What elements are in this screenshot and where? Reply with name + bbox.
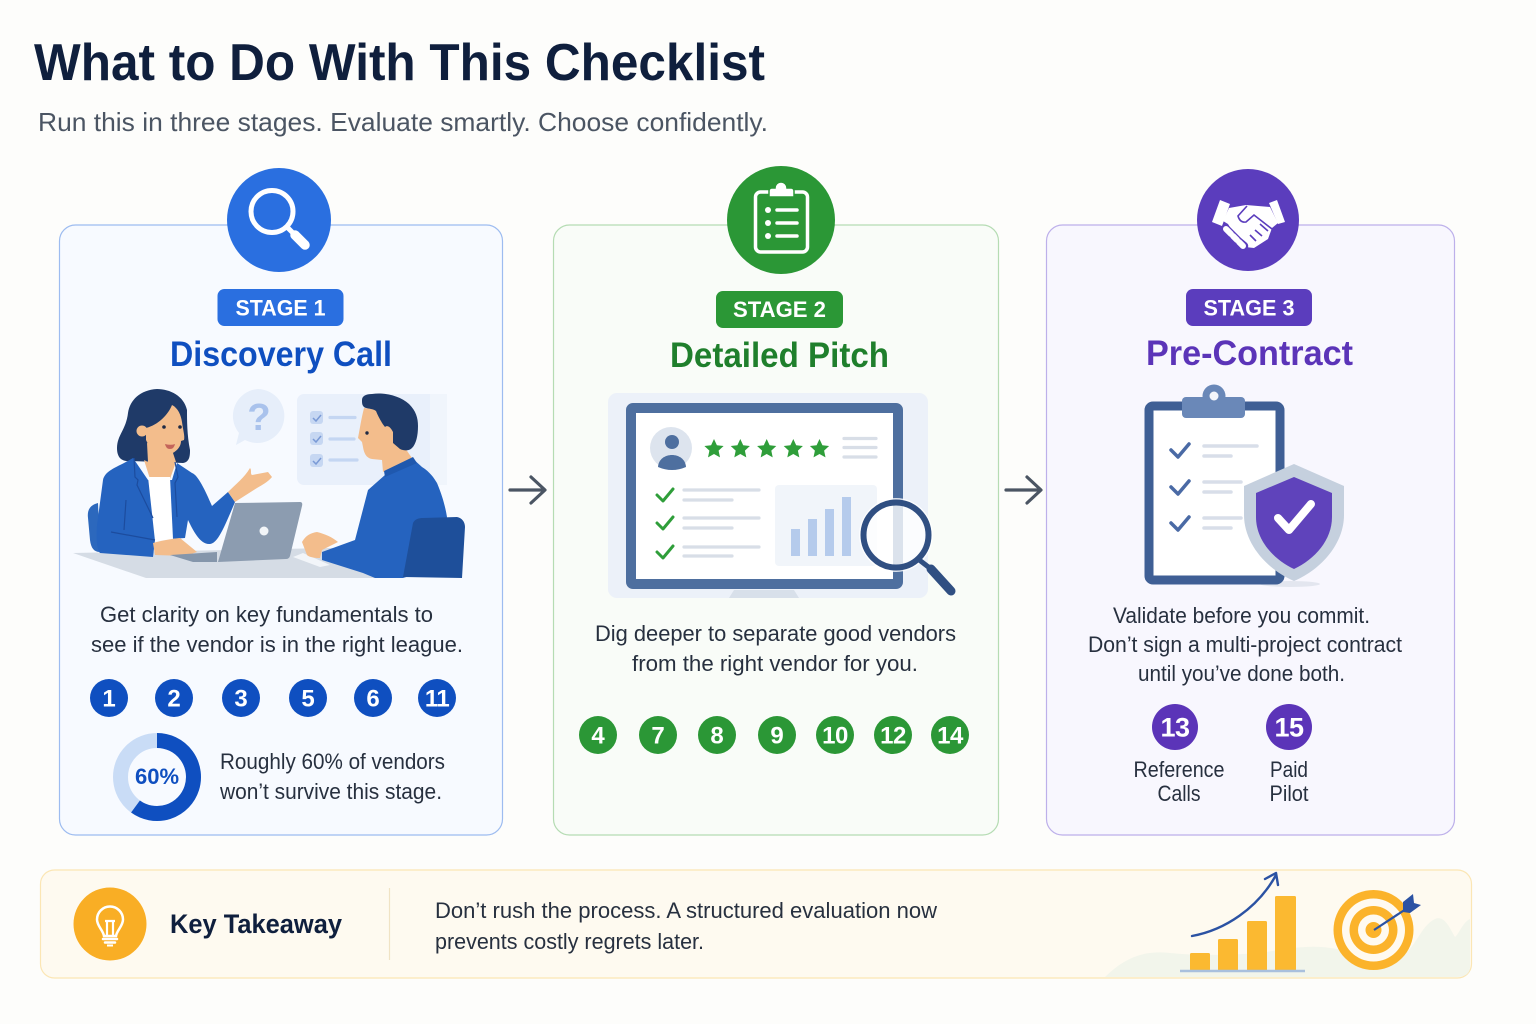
numbered checklist items: 8 xyxy=(710,722,724,750)
illustration: two people meeting at a table xyxy=(73,389,465,578)
description: from the right vendor for you. xyxy=(632,651,918,676)
item 15 paid pilot xyxy=(1266,704,1312,806)
takeaway text: prevents costly regrets later. xyxy=(435,929,704,954)
heading: detailed pitch: Detailed Pitch xyxy=(670,336,889,375)
arrow: stage 1 to stage 2 xyxy=(510,477,545,503)
item 13 reference calls: Reference xyxy=(1134,757,1224,782)
heading: discovery call: Discovery Call xyxy=(170,335,392,374)
description xyxy=(91,602,463,657)
badge: stage 2 xyxy=(716,291,843,328)
takeaway text xyxy=(435,898,937,954)
icon: growth bar chart xyxy=(1180,873,1305,971)
numbered checklist items: 12 xyxy=(880,722,906,750)
numbered checklist items: 6 xyxy=(366,686,380,712)
numbered checklist items: 7 xyxy=(651,722,665,750)
heading: pre-contract: Pre-Contract xyxy=(1146,334,1353,373)
panel: stage 1 discovery call xyxy=(60,168,502,835)
illustration: clipboard and shield xyxy=(1149,384,1344,587)
numbered checklist items: 4 xyxy=(591,722,605,750)
description xyxy=(595,621,956,676)
item 13 reference calls: Calls xyxy=(1158,781,1200,806)
icon: magnifying glass xyxy=(227,168,331,272)
heading: key takeaway: Key Takeaway xyxy=(170,909,342,939)
numbered checklist items: 3 xyxy=(234,686,248,712)
question bubble: ? xyxy=(247,397,271,439)
numbered checklist items: 1 xyxy=(102,686,116,712)
numbered checklist items: 11 xyxy=(425,686,449,712)
numbered checklist items: 9 xyxy=(770,722,784,750)
numbered checklist items xyxy=(579,716,969,754)
numbered checklist items xyxy=(90,679,456,717)
icon: clipboard checklist xyxy=(727,166,835,274)
numbered checklist items: 14 xyxy=(937,722,964,750)
table xyxy=(73,547,380,578)
numbered checklist items: 10 xyxy=(822,722,848,750)
decorative hills xyxy=(1105,918,1470,977)
item 15 paid pilot: Paid xyxy=(1270,757,1308,782)
subtitle: Run this in three stages. Evaluate smartly. Choose confidently. xyxy=(38,107,768,137)
description: Validate before you commit. xyxy=(1113,603,1370,628)
badge: stage 3: STAGE 3 xyxy=(1204,296,1294,320)
callout: 60 percent of vendors: won’t survive this stage. xyxy=(219,779,442,804)
panel: stage 3 pre-contract xyxy=(1046,169,1454,835)
item 15 paid pilot: 15 xyxy=(1274,712,1304,742)
description: Don’t sign a multi-project contract xyxy=(1088,632,1402,657)
man xyxy=(302,393,465,578)
description xyxy=(1088,603,1402,686)
badge: stage 3 xyxy=(1186,289,1312,326)
takeaway text: Don’t rush the process. A structured evaluation now xyxy=(435,898,937,923)
woman xyxy=(88,389,272,557)
arrow: stage 2 to stage 3 xyxy=(1006,477,1041,503)
item 15 paid pilot: Pilot xyxy=(1270,781,1308,806)
badge: stage 2: STAGE 2 xyxy=(733,297,826,322)
paper xyxy=(293,553,330,567)
description: Get clarity on key fundamentals to xyxy=(100,602,433,627)
question bubble xyxy=(233,389,284,445)
callout: 60 percent of vendors xyxy=(219,749,445,804)
icon: target with arrow xyxy=(1334,890,1421,970)
badge: stage 1 xyxy=(218,289,344,326)
panel: key takeaway xyxy=(40,870,1472,978)
item 13 reference calls: 13 xyxy=(1160,712,1190,742)
donut chart: 60% xyxy=(120,740,194,814)
illustration: monitor with ratings and magnifier xyxy=(608,393,951,598)
icon: handshake xyxy=(1197,169,1299,271)
icon: lightbulb xyxy=(74,888,146,960)
donut chart: 60%: 60% xyxy=(135,764,179,789)
numbered checklist items: 5 xyxy=(301,686,315,712)
description: Dig deeper to separate good vendors xyxy=(595,621,956,646)
numbered checklist items: 2 xyxy=(167,686,181,712)
stars xyxy=(704,439,829,457)
title: What to Do With This Checklist xyxy=(34,34,765,92)
callout: 60 percent of vendors: Roughly 60% of vendors xyxy=(220,749,445,774)
laptop xyxy=(170,502,302,562)
description: until you’ve done both. xyxy=(1138,661,1345,686)
description: see if the vendor is in the right league. xyxy=(91,632,463,657)
badge: stage 1: STAGE 1 xyxy=(236,296,326,320)
panel: stage 2 detailed pitch xyxy=(554,166,998,835)
item 13 reference calls xyxy=(1134,704,1224,806)
